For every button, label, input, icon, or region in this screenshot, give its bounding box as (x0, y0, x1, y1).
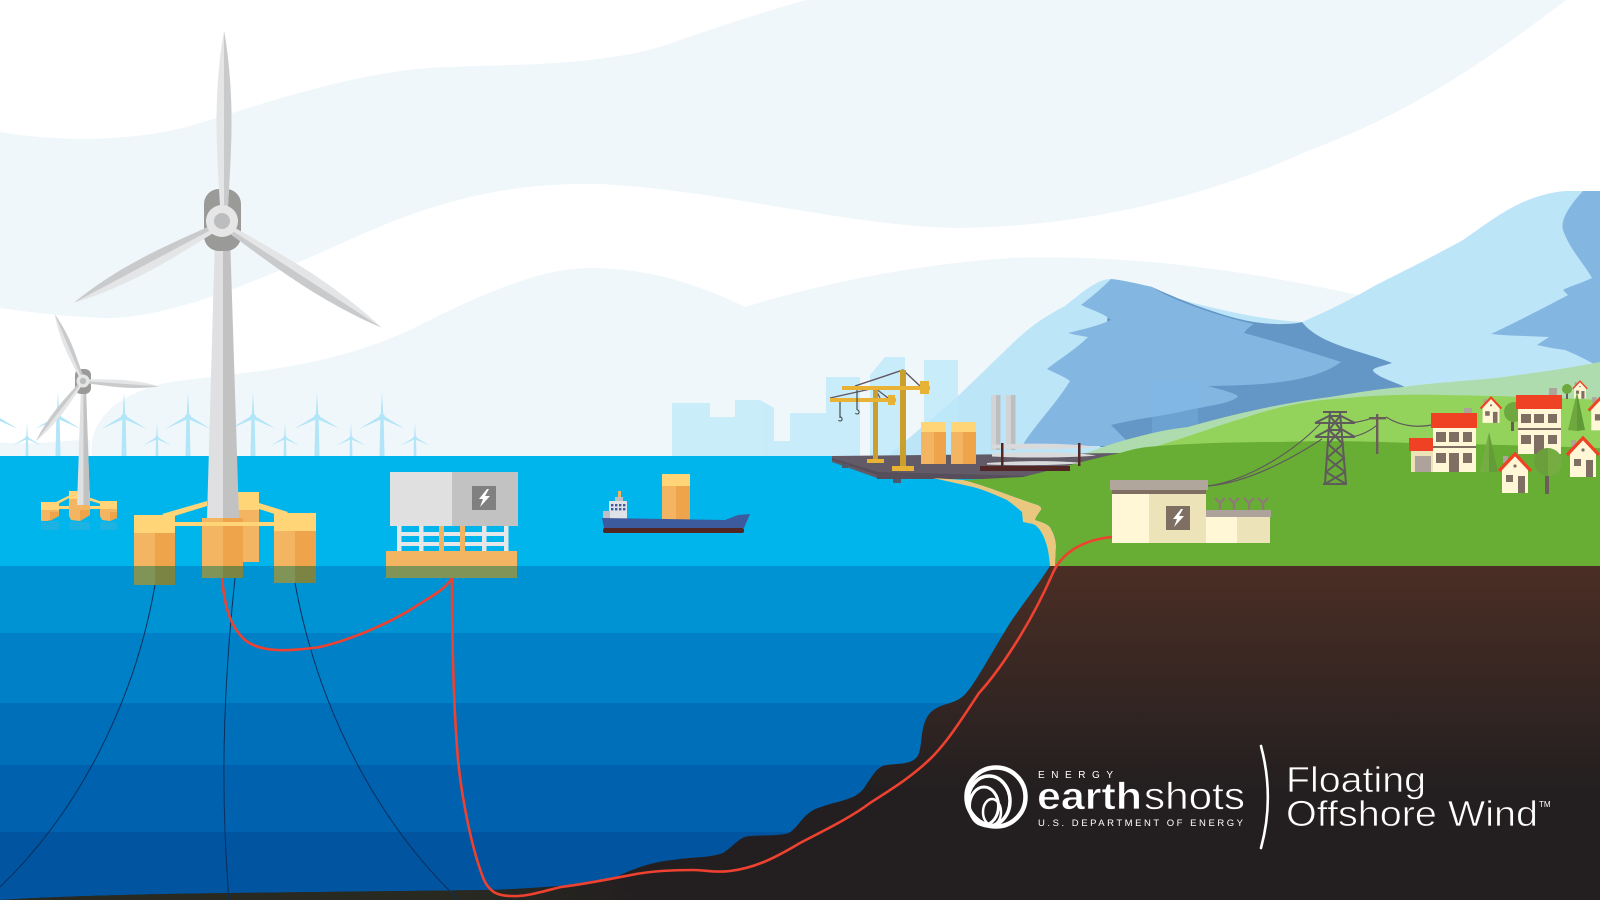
platform: left column (134, 515, 175, 585)
onshore substation: power icon (1166, 506, 1190, 530)
port: tower sections (991, 395, 1016, 450)
inter-array cable (222, 578, 452, 650)
export cable to shore (452, 537, 1112, 896)
townhouse: left with garage (1409, 408, 1477, 472)
house: far small (1573, 381, 1587, 399)
cargo ship (602, 474, 750, 533)
large turbine: tower (207, 235, 239, 518)
village (1409, 381, 1600, 494)
platform: right column (274, 513, 316, 583)
small turbine: platform (41, 491, 117, 521)
house: front right (1567, 438, 1599, 477)
mountain: pale back range (888, 191, 1600, 456)
small turbine: tower (77, 388, 90, 505)
title: Offshore Wind: Offshore Wind (1286, 793, 1538, 834)
mountain: dark shaded face (1100, 279, 1405, 447)
ocean depth bands (0, 456, 1100, 900)
tree: small round (1562, 384, 1572, 399)
city skyline (672, 357, 958, 456)
house: front centre (1499, 454, 1531, 493)
port: stacked blades (987, 444, 1096, 465)
electricity pylon (1315, 412, 1355, 484)
small turbine: blades (33, 313, 159, 443)
substation: power icon (472, 486, 496, 510)
large floating turbine (71, 31, 385, 585)
logo: earth: earth (1037, 776, 1142, 818)
offshore substation (386, 472, 518, 578)
sky background (0, 0, 1600, 460)
port cargo (830, 370, 1096, 471)
green hills (1086, 362, 1600, 480)
port: crane tall (842, 370, 930, 471)
shoreline sand (933, 478, 1056, 566)
onshore substation: main hall (1110, 480, 1208, 543)
ship: container (662, 474, 690, 520)
logo: ring mark (966, 768, 1026, 826)
onshore substation: annex (1206, 510, 1271, 543)
townhouse: right (1516, 388, 1562, 454)
program title (1286, 759, 1551, 834)
earth and seabed (0, 566, 1600, 900)
title: Floating: Floating (1286, 759, 1426, 800)
distant turbine farm (0, 392, 429, 464)
transmission lines (1208, 417, 1432, 486)
port quay (832, 453, 1122, 483)
utility pole (1369, 414, 1386, 454)
cloud: lower band (92, 257, 1400, 456)
skyline: centre tower (870, 357, 905, 456)
logo: shots: shots (1144, 776, 1245, 818)
small turbine: nacelle (75, 369, 91, 394)
hill: light green (1143, 395, 1600, 480)
tree: large round (1534, 448, 1562, 494)
quay: deck (832, 453, 1122, 478)
mooring lines (0, 578, 459, 900)
seabed olive shadow (0, 880, 640, 900)
ship: bridge (603, 491, 627, 519)
large turbine: blades (71, 31, 385, 334)
faded building in mountain haze (1152, 382, 1198, 444)
onshore substation: insulators (1215, 498, 1268, 511)
tree: behind round (1504, 402, 1524, 431)
ship: hull (602, 514, 750, 528)
tree: conifer left (1480, 432, 1498, 472)
house: right back (1589, 395, 1600, 430)
skyline: left blocks (672, 377, 860, 456)
small floating turbine (33, 313, 159, 530)
skyline: right tower (924, 360, 958, 456)
house: back (1481, 398, 1501, 423)
hill: pale distant (1086, 362, 1600, 470)
ship: keel (603, 528, 744, 533)
mountain: mid blue right face (1491, 191, 1600, 367)
cloud: small left wisp (0, 440, 90, 456)
large turbine: hub (206, 205, 238, 237)
platform: centre column (202, 518, 243, 578)
green coastal land (963, 441, 1600, 566)
onshore substation (1110, 480, 1271, 543)
logo: Energy Earthshots (966, 768, 1245, 829)
substation: barge (386, 551, 517, 566)
large turbine: nacelle (204, 189, 241, 251)
logo: ENERGY: ENERGY (1038, 770, 1113, 781)
port: containers (921, 422, 976, 464)
substation: legs and rails (397, 526, 508, 552)
port: rack (980, 443, 1080, 471)
port: crane small (830, 388, 896, 463)
platform: back column (238, 492, 259, 562)
mountain: mid blue left face (1022, 279, 1341, 446)
small turbine: hub (76, 374, 90, 388)
tree: conifer right (1568, 392, 1585, 431)
platform: braces (162, 501, 288, 526)
logo divider (1261, 746, 1268, 848)
small turbine: water reflection (41, 522, 117, 530)
substation: housing (390, 472, 452, 526)
cloud: upper band (0, 0, 1566, 318)
title: trademark: TM (1539, 800, 1551, 809)
mountains (888, 191, 1600, 456)
logo: department line: U.S. DEPARTMENT OF ENERGY (1038, 818, 1244, 829)
quay: shaded edge (832, 458, 1030, 479)
quay: support legs (842, 464, 901, 483)
